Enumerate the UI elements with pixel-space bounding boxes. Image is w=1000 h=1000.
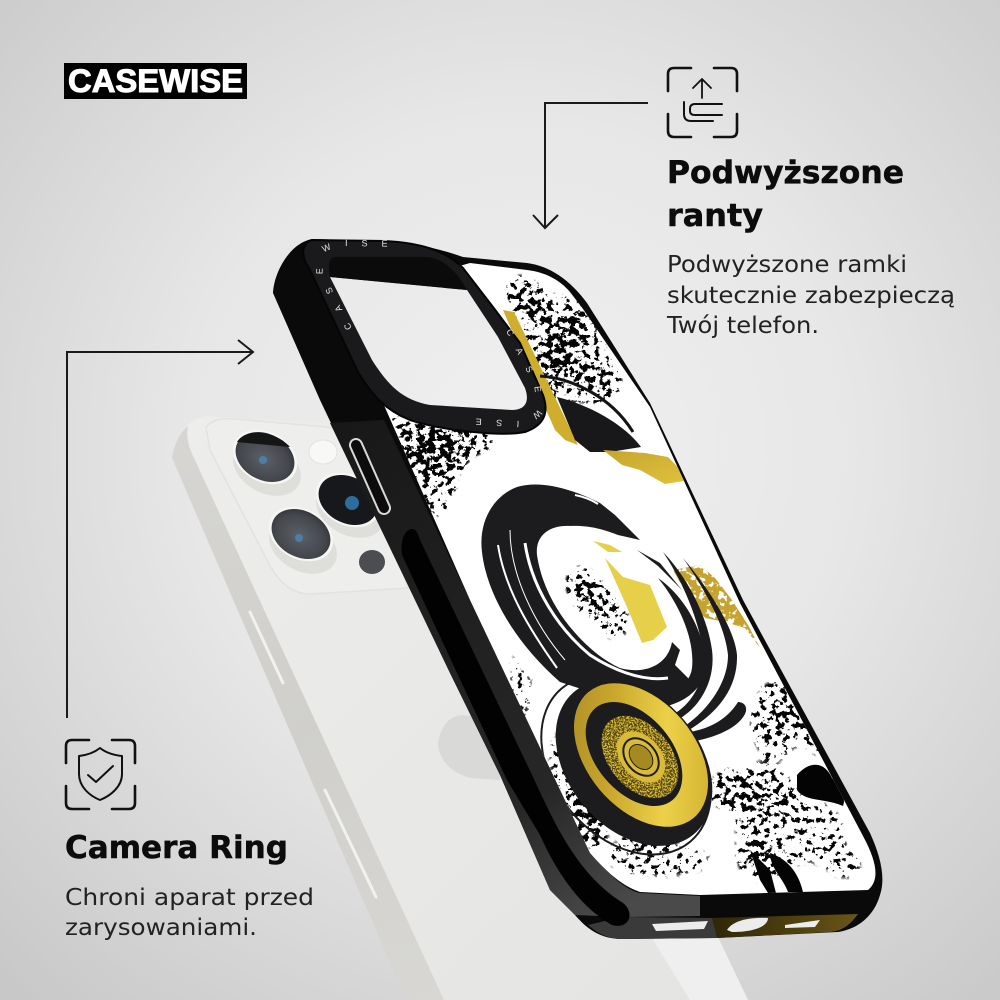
text: raised edges description: skutecznie zabezpieczą xyxy=(667,283,955,309)
heading: camera ring: Camera Ring xyxy=(65,830,288,866)
gold bar xyxy=(503,310,578,445)
text: raised edges description: Podwyższone ramki xyxy=(667,252,907,278)
dome arc line xyxy=(540,376,633,432)
side slot xyxy=(402,529,630,926)
flash xyxy=(309,440,337,464)
side buttons xyxy=(250,612,376,897)
logo: CASEWISE xyxy=(68,63,243,99)
artwork xyxy=(383,270,867,893)
bottom gold tinted edge xyxy=(710,914,858,938)
gold patch right xyxy=(673,565,760,648)
inner ink speckle xyxy=(564,564,630,640)
disc inner black ring xyxy=(586,702,682,806)
disc textured band xyxy=(601,716,679,798)
phone back xyxy=(172,416,748,1000)
ring text xyxy=(316,240,543,428)
camera island xyxy=(206,419,408,594)
disc black base xyxy=(556,688,712,846)
camera ring xyxy=(304,239,547,435)
gold patch top xyxy=(603,450,690,484)
black brush arcs xyxy=(637,550,746,742)
disc thin outline xyxy=(540,684,712,856)
disc textured base xyxy=(602,716,678,798)
power button xyxy=(356,445,384,508)
thick brush band xyxy=(481,484,690,708)
icon: raised edges xyxy=(668,68,737,137)
white brush blob xyxy=(445,456,754,778)
text: camera ring description: zarysowaniami. xyxy=(65,915,257,941)
text: camera ring description xyxy=(65,885,314,941)
bottom grey edge xyxy=(588,917,717,939)
side band xyxy=(172,426,444,1000)
arrow: camera ring pointer xyxy=(67,340,253,718)
side bezel xyxy=(330,420,700,917)
arrow: raised edges pointer xyxy=(533,103,648,228)
ring inner wall xyxy=(329,257,467,290)
gold disc xyxy=(540,683,712,856)
bottom ports xyxy=(652,918,820,932)
heading: raised edges: ranty xyxy=(667,198,763,234)
case body xyxy=(273,239,882,939)
silver phone xyxy=(172,416,748,1000)
phone case xyxy=(273,239,882,939)
lens middle xyxy=(259,496,347,585)
white ring gaps xyxy=(498,495,668,679)
heading: raised edges xyxy=(667,155,904,234)
ink splatter xyxy=(383,270,867,883)
ring text: CASEWISE xyxy=(476,330,543,428)
text: raised edges description xyxy=(666,252,955,339)
lens top xyxy=(223,419,311,507)
white speckle on gold xyxy=(673,565,760,648)
light streak below case xyxy=(650,935,748,1000)
ring text: CASEWISE xyxy=(316,240,388,330)
ring body xyxy=(303,240,546,434)
heading: raised edges: Podwyższone xyxy=(667,155,904,191)
gold specks inner xyxy=(593,541,622,552)
lens right xyxy=(306,462,394,549)
text: camera ring description: Chroni aparat przed xyxy=(65,885,314,911)
sensor xyxy=(359,550,385,574)
solid ink blots xyxy=(750,765,844,893)
gold patch inner xyxy=(605,558,667,643)
text: raised edges description: Twój telefon. xyxy=(666,313,819,339)
black dome xyxy=(557,397,641,452)
ring opening xyxy=(330,277,527,410)
disc gold xyxy=(574,683,708,827)
screen print xyxy=(340,263,875,895)
disc core xyxy=(616,731,666,783)
icon: shield xyxy=(66,740,135,809)
logo mark xyxy=(438,715,500,780)
